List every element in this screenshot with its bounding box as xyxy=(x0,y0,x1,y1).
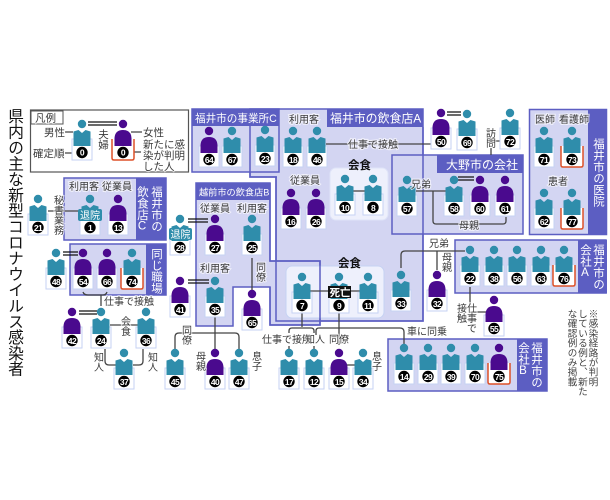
person 18: 18 xyxy=(289,155,298,165)
labels: 仕事で接触 xyxy=(262,333,312,346)
labels: 兄弟 xyxy=(429,238,449,250)
person 33 xyxy=(391,271,411,311)
person 36: 36 xyxy=(142,336,151,346)
person 64 xyxy=(199,127,219,167)
person 76: 76 xyxy=(560,274,569,284)
person 54 xyxy=(73,249,93,289)
person 63: 63 xyxy=(537,274,546,284)
panel: 福井市の飲食店C: 飲食店C xyxy=(136,185,149,232)
labels: 看護師 xyxy=(559,113,589,126)
panel: 福井市の飲食店A header: 福井市の飲食店A xyxy=(330,112,421,126)
panel: 福井市の医院 xyxy=(530,109,607,235)
person 35 xyxy=(205,277,225,317)
legend panel: 0 xyxy=(80,148,85,158)
legend panel: した人 xyxy=(143,161,175,173)
legend panel: 新たに感 xyxy=(143,138,185,151)
person 42: 42 xyxy=(68,336,77,346)
person 57: 57 xyxy=(403,204,412,214)
person 50: 50 xyxy=(437,137,446,147)
person 26: 26 xyxy=(312,217,321,227)
labels: 利用客 xyxy=(237,202,267,215)
person 45 xyxy=(165,349,185,389)
labels: 同僚 xyxy=(254,262,266,282)
panel: 福井市の医院: 福井市の医院 xyxy=(592,137,605,207)
person 42 xyxy=(62,308,82,348)
person 72: 72 xyxy=(506,137,515,147)
panel: 福井市の会社A xyxy=(455,240,607,294)
person 69 xyxy=(457,110,477,150)
person 33: 33 xyxy=(397,299,406,309)
note: している例と、新た xyxy=(576,309,588,396)
person 67 xyxy=(222,127,242,167)
person 60: 60 xyxy=(476,204,485,214)
person 17: 17 xyxy=(285,377,294,387)
person 8 xyxy=(363,175,383,215)
labels: 利用客 xyxy=(69,180,99,193)
person 37 xyxy=(114,349,134,389)
labels: 母親 xyxy=(194,351,206,372)
person 15 xyxy=(329,349,349,389)
legend panel: 確定順 xyxy=(33,147,65,160)
person 16 xyxy=(281,189,301,229)
labels: 兄弟 xyxy=(411,179,431,191)
person 57 xyxy=(397,176,417,216)
person 55: 55 xyxy=(490,324,499,334)
labels: 知人 xyxy=(146,351,158,372)
badge: 死亡 on 9: 死亡 xyxy=(330,286,351,299)
person 74 xyxy=(121,249,143,289)
panel: 福井市の会社B xyxy=(388,339,547,391)
person 58: 58 xyxy=(450,204,459,214)
person 74: 74 xyxy=(128,277,137,287)
person 24 xyxy=(91,308,111,348)
labels: 知人 xyxy=(92,351,104,372)
person 11 xyxy=(358,273,378,313)
person 25 xyxy=(242,215,262,255)
person 34 xyxy=(353,349,373,389)
person 18 xyxy=(283,127,303,167)
panel: 会食 group 10 and 8 xyxy=(330,168,388,220)
person 23: 23 xyxy=(261,154,270,164)
person 63 xyxy=(531,246,551,286)
person 9: 9 xyxy=(337,301,342,311)
person 25: 25 xyxy=(248,243,257,253)
panel: 福井市の飲食店C xyxy=(64,178,166,240)
person 62 xyxy=(534,189,554,229)
panel: 福井市の飲食店C: 福井市の xyxy=(150,185,163,232)
person 1: 1 xyxy=(88,223,93,233)
person 58 xyxy=(444,176,464,216)
person 28 xyxy=(170,215,190,255)
labels: 患者 xyxy=(548,176,568,188)
note: な確認例のみ掲載 xyxy=(566,309,577,387)
badge: 退院 on 28: 退院 xyxy=(170,229,190,241)
person 12 xyxy=(304,349,324,389)
labels: 秘書業務 xyxy=(52,194,64,236)
person 69: 69 xyxy=(463,138,472,148)
person 15: 15 xyxy=(335,377,344,387)
person 41 xyxy=(170,277,190,317)
legend panel: 0 xyxy=(121,148,126,158)
panel: 大野市の会社 xyxy=(392,155,523,234)
panel: 同じ職場: 同じ職場 xyxy=(150,248,163,295)
labels: 仕事で接触 xyxy=(348,138,398,151)
labels: 利用客 xyxy=(289,113,319,126)
person 47 xyxy=(229,349,249,389)
person 65 xyxy=(242,290,262,330)
person 60 xyxy=(470,176,490,216)
person 47: 47 xyxy=(235,377,244,387)
person 70 xyxy=(465,344,485,384)
labels: 接触 xyxy=(454,302,466,324)
labels: 会食 xyxy=(348,158,371,172)
person 27 xyxy=(205,215,225,255)
person 50 xyxy=(431,109,451,149)
panel: 福井市の会社B: 会社B xyxy=(517,342,530,377)
person 45: 45 xyxy=(171,377,180,387)
labels: 従業員 xyxy=(102,180,132,193)
panel: 大野市の会社: 大野市の会社 xyxy=(446,157,518,172)
person 48: 48 xyxy=(52,277,61,287)
person 55 xyxy=(484,296,504,336)
person 21 xyxy=(28,195,48,235)
legend panel xyxy=(30,110,188,173)
person 46: 46 xyxy=(313,155,322,165)
person 65: 65 xyxy=(248,318,257,328)
labels: 知人 xyxy=(305,333,325,346)
note: ※感染経路が判明 xyxy=(586,309,598,387)
person 66: 66 xyxy=(103,277,112,287)
person 48 xyxy=(46,249,66,289)
person 17 xyxy=(279,349,299,389)
person 40 xyxy=(205,349,225,389)
person 29 xyxy=(418,344,438,384)
person 70: 70 xyxy=(471,372,480,382)
person 32 xyxy=(427,271,447,311)
note xyxy=(566,309,598,396)
panel: 福井市の飲食店A outline xyxy=(250,109,423,321)
person 23 xyxy=(255,126,275,166)
person 7 xyxy=(292,273,312,313)
person 56: 56 xyxy=(513,274,522,284)
connectors xyxy=(48,112,506,365)
person 72 xyxy=(500,109,520,149)
person 16: 16 xyxy=(287,217,296,227)
person 10 xyxy=(335,175,355,215)
person 26 xyxy=(306,189,326,229)
person 22: 22 xyxy=(466,274,475,284)
legend panel: 染が判明 xyxy=(143,149,185,162)
labels: 医師 xyxy=(535,113,555,126)
labels: 従業員 xyxy=(200,202,230,215)
labels: 会食 xyxy=(118,315,130,337)
labels: 息子 xyxy=(250,350,262,372)
person 46 xyxy=(307,127,327,167)
panel: 福井市の会社A: 福井市の xyxy=(592,243,605,290)
panel: 越前市の飲食店B: 越前市の飲食店B xyxy=(199,186,269,198)
person 10: 10 xyxy=(341,203,350,213)
panel: 同じ職場 xyxy=(70,244,166,295)
person 56 xyxy=(507,246,527,286)
person 71: 71 xyxy=(540,155,549,165)
panel: outline overlay xyxy=(270,127,423,325)
person 24: 24 xyxy=(97,336,106,346)
labels: 同僚 xyxy=(180,325,192,345)
person 71 xyxy=(534,127,554,167)
person 61: 61 xyxy=(501,204,510,214)
badge: 退院 on 1: 退院 xyxy=(80,210,100,222)
person 41: 41 xyxy=(176,305,185,315)
legend panel: 女性 xyxy=(143,126,164,139)
person 73 xyxy=(561,127,583,167)
labels: 車に同乗 xyxy=(407,325,447,338)
panel: 福井市の事業所C: 福井市の事業所C xyxy=(195,112,277,125)
person 12: 12 xyxy=(310,377,319,387)
labels: 息子 xyxy=(370,350,382,372)
labels: 同僚 xyxy=(329,333,349,346)
person 38: 38 xyxy=(490,274,499,284)
person 64: 64 xyxy=(205,155,214,165)
labels xyxy=(52,113,589,372)
panel: 会食 group 7, 9, 11 xyxy=(286,266,384,318)
person 73: 73 xyxy=(568,155,577,165)
person 32: 32 xyxy=(433,299,442,309)
labels: 会食 xyxy=(338,256,361,270)
legend panel: 凡例 xyxy=(35,112,56,124)
person 38 xyxy=(484,246,504,286)
person 13 xyxy=(108,195,128,235)
person 75: 75 xyxy=(495,372,504,382)
labels: 従業員 xyxy=(290,174,320,187)
person 36 xyxy=(136,308,156,348)
person 14 xyxy=(394,344,414,384)
person 28: 28 xyxy=(176,243,185,253)
panel: 福井市の会社A: 会社A xyxy=(579,244,592,279)
person 61 xyxy=(495,176,515,216)
person 39: 39 xyxy=(447,372,456,382)
person 7: 7 xyxy=(300,301,305,311)
labels: 仕事で xyxy=(464,302,476,333)
legend panel: 男性 xyxy=(44,126,65,139)
person 67: 67 xyxy=(228,155,237,165)
person 11: 11 xyxy=(364,301,373,311)
labels: 母親 xyxy=(459,220,479,232)
person 35: 35 xyxy=(211,305,220,315)
legend panel: 夫婦 xyxy=(97,129,109,150)
person 77: 77 xyxy=(568,217,577,227)
labels: 訪問 xyxy=(484,127,496,149)
panel: 福井市の会社B: 福井市の xyxy=(530,341,543,388)
person 22 xyxy=(460,246,480,286)
person 34: 34 xyxy=(359,377,368,387)
person 9 xyxy=(329,273,349,313)
person 8: 8 xyxy=(371,203,376,213)
person 29: 29 xyxy=(424,372,433,382)
person 40: 40 xyxy=(211,377,220,387)
labels: 利用客 xyxy=(200,262,230,275)
person 27: 27 xyxy=(211,243,220,253)
person 39 xyxy=(441,344,461,384)
person 21: 21 xyxy=(34,223,43,233)
panel: 福井市の事業所C xyxy=(192,109,279,177)
title: 県内の主な新型コロナウイルス感染者 xyxy=(6,108,23,377)
person 1 xyxy=(80,195,100,235)
person 75 xyxy=(488,344,510,384)
person 76 xyxy=(553,246,575,286)
panel: 越前市の飲食店B xyxy=(196,183,320,326)
person 62: 62 xyxy=(540,217,549,227)
labels: 仕事で接触 xyxy=(104,295,154,308)
person 13: 13 xyxy=(114,223,123,233)
person 66 xyxy=(97,249,117,289)
person 14: 14 xyxy=(400,372,409,382)
person 54: 54 xyxy=(79,277,88,287)
labels: 母親 xyxy=(440,252,452,273)
person 77 xyxy=(561,189,583,229)
person 37: 37 xyxy=(120,377,129,387)
